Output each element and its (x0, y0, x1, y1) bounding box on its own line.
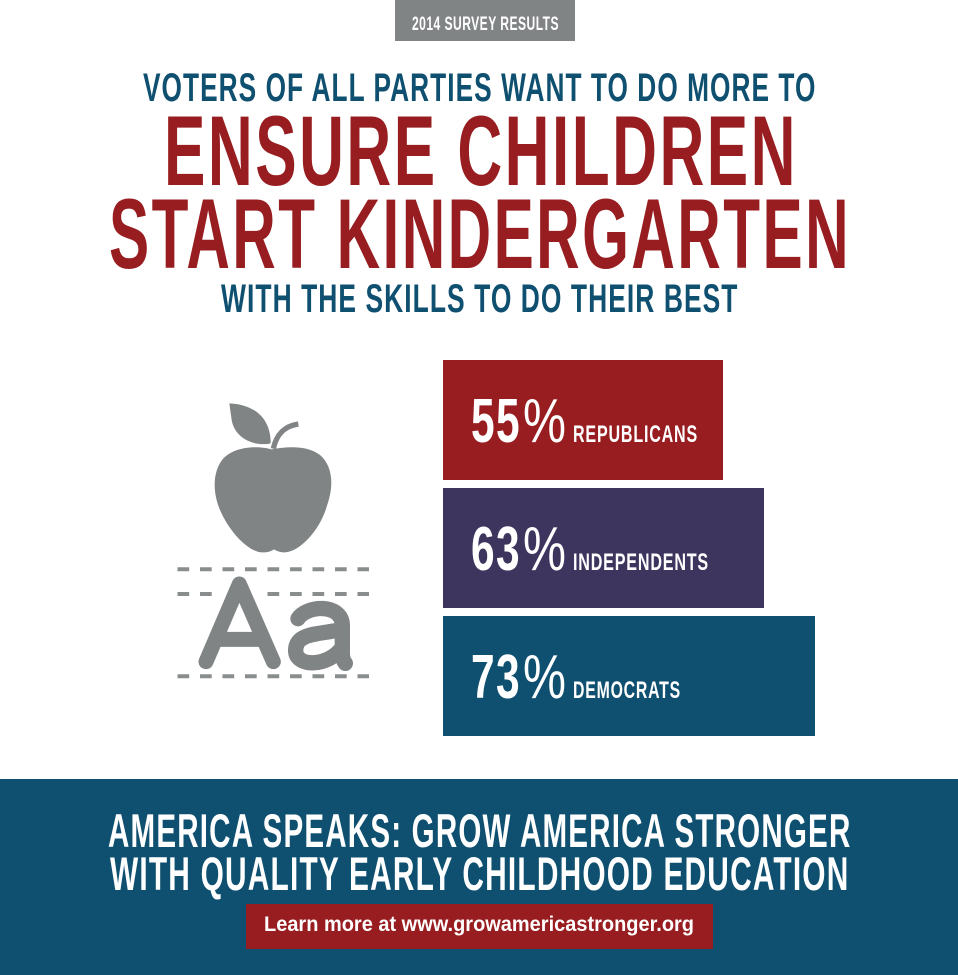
bar: 55% Republicans: 55 (471, 387, 521, 456)
bar: 73% Democrats: 73 (471, 643, 521, 712)
icon: handwriting lines with Aa (178, 569, 369, 676)
badge: 2014 survey results (395, 0, 575, 41)
bar: 55% Republicans: REPUBLICANS (573, 421, 698, 448)
bar: 55% Republicans: % (523, 387, 566, 456)
title (109, 66, 851, 321)
bar: 73% Democrats (443, 616, 815, 736)
call to action button: Learn more at www.growamericastronger.org (264, 913, 694, 936)
bar: 63% Independents: % (523, 515, 566, 584)
bar: 63% Independents (443, 488, 764, 608)
badge: 2014 survey results: 2014 SURVEY RESULTS (412, 14, 559, 35)
footer heading (108, 804, 852, 900)
bar: 55% Republicans (443, 360, 723, 480)
footer panel (0, 779, 958, 975)
bar: 63% Independents: INDEPENDENTS (573, 549, 709, 576)
icon: apple (215, 403, 331, 552)
bar: 73% Democrats: DEMOCRATS (573, 677, 681, 704)
call to action button (246, 904, 713, 949)
bar: 73% Democrats: % (523, 643, 566, 712)
bar: 63% Independents: 63 (471, 515, 521, 584)
